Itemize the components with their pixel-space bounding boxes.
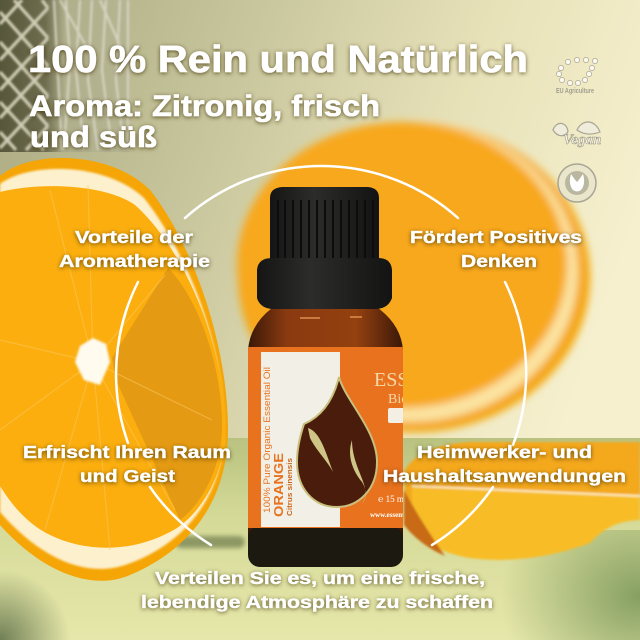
benefit: Heimwerker- und Haushaltsanwendungen: Haushaltsanwendungen: [383, 466, 626, 486]
label: [248, 347, 403, 528]
benefit: Fördert Positives Denken: Denken: [461, 251, 537, 271]
benefit: Verteilen Sie es: [141, 568, 493, 612]
right label text: [370, 373, 403, 517]
benefit: Erfrischt Ihren Raum und Geist: und Geist: [80, 466, 175, 486]
benefit: Verteilen Sie es: Verteilen Sie es, um eine frische,: [155, 568, 485, 588]
vertical label text: ORANGE: [271, 453, 286, 517]
benefit: Erfrischt Ihren Raum und Geist: Erfrischt Ihren Raum: [23, 442, 231, 462]
badge: cruelty free rabbit: [558, 164, 596, 202]
benefit: Fördert Positives Denken: Fördert Positives: [410, 227, 582, 247]
cap collar: [257, 258, 392, 309]
vertical label text: 100% Pure Organic Essential Oil: [262, 367, 272, 513]
right label text: ESSEN: [374, 369, 435, 391]
benefit: Vorteile der Aromatherapie: Vorteile der: [75, 227, 193, 247]
badge: EU organic leaf: EU Agriculture: [556, 86, 594, 95]
title: 100 % Rein und Natürlich: [28, 39, 528, 81]
bottle highlights: [300, 317, 362, 318]
right label text: www.essent: [370, 511, 405, 519]
orange slice bottom right: [404, 442, 640, 560]
oil drop emblem: [297, 377, 377, 507]
white circular arc segments: [116, 166, 526, 545]
subtitle line one: Aroma: Zitronig, frisch: [29, 90, 380, 123]
badge: vegan: [553, 122, 601, 148]
string net bag: [0, 0, 130, 152]
benefit: Verteilen Sie es: lebendige Atmosphäre zu schaffen: [141, 592, 493, 612]
certification badges: [553, 57, 601, 202]
badge: EU organic leaf: [556, 57, 598, 95]
vertical label text: [264, 368, 292, 516]
dropper cap: [270, 187, 379, 262]
vertical label text: Citrus sinensis: [285, 458, 294, 516]
benefit: Fördert Positives Denken: [410, 227, 582, 271]
benefit: Erfrischt Ihren Raum und Geist: [23, 442, 231, 486]
benefit: Vorteile der Aromatherapie: [59, 227, 210, 271]
right orange half: [237, 122, 590, 432]
product bottle: [248, 187, 403, 567]
bottle glass body: [248, 308, 403, 566]
left orange half: [0, 158, 228, 581]
right label text: Bio: [388, 392, 408, 407]
benefit: Heimwerker- und Haushaltsanwendungen: Heimwerker- und: [417, 442, 592, 462]
right label text: ℮ 15 ml: [378, 494, 407, 504]
subtitle line two: und süß: [30, 121, 157, 154]
bottle base shade: [248, 526, 403, 567]
cap ribs: [278, 200, 373, 260]
benefit: Vorteile der Aromatherapie: Aromatherapie: [59, 251, 210, 271]
benefit: Heimwerker- und Haushaltsanwendungen: [383, 442, 626, 486]
badge: vegan: Vegan: [563, 132, 601, 148]
